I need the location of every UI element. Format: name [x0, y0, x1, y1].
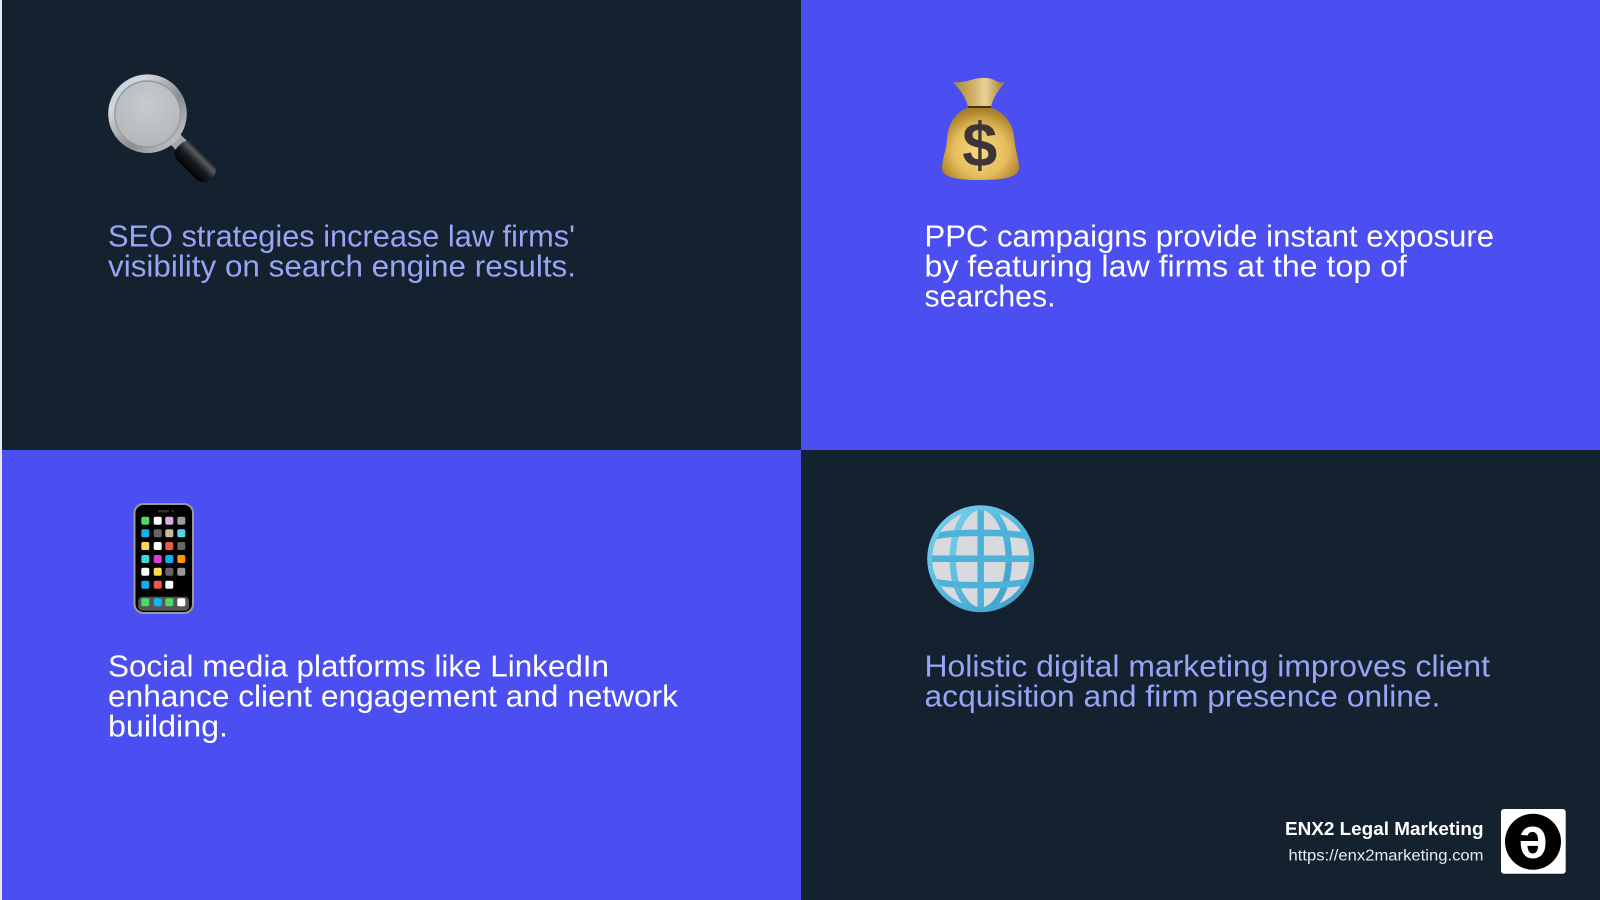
panel: social media	[2, 450, 801, 900]
left edge strip	[0, 0, 2, 900]
text: PPC campaigns: by featuring law firms at the top of	[924, 249, 1407, 284]
logo	[1501, 805, 1566, 874]
text: social media platforms: building.	[108, 709, 228, 744]
text: PPC campaigns: searches.	[924, 279, 1056, 314]
text: SEO strategies	[108, 219, 576, 284]
icon: money bag: $	[962, 111, 997, 180]
brand url: https://enx2marketing.com	[1288, 848, 1484, 864]
brand footer	[1285, 805, 1566, 874]
text: SEO strategies: SEO strategies increase law firms'	[108, 219, 575, 254]
text: holistic digital marketing: Holistic digital marketing improves client	[924, 649, 1490, 684]
icon: smartphone	[134, 504, 193, 613]
logo: ə	[1519, 805, 1547, 871]
text: social media platforms: Social media platforms like LinkedIn	[108, 649, 609, 684]
text: PPC campaigns	[924, 219, 1494, 314]
text: holistic digital marketing	[924, 649, 1490, 714]
brand name: ENX2 Legal Marketing	[1285, 818, 1484, 839]
icon: magnifying glass	[108, 74, 220, 186]
panel: holistic digital marketing	[926, 505, 1566, 874]
icon: money bag	[942, 78, 1019, 180]
text: holistic digital marketing: acquisition and firm presence online.	[924, 679, 1440, 714]
icon: globe	[925, 503, 1036, 614]
panel: SEO	[2, 0, 801, 450]
text: social media platforms	[108, 649, 678, 744]
text: SEO strategies: visibility on search engine results.	[108, 249, 576, 284]
panel: PPC	[801, 0, 1600, 450]
text: PPC campaigns: PPC campaigns provide instant exposure	[924, 219, 1494, 254]
text: social media platforms: enhance client engagement and network	[108, 679, 678, 714]
